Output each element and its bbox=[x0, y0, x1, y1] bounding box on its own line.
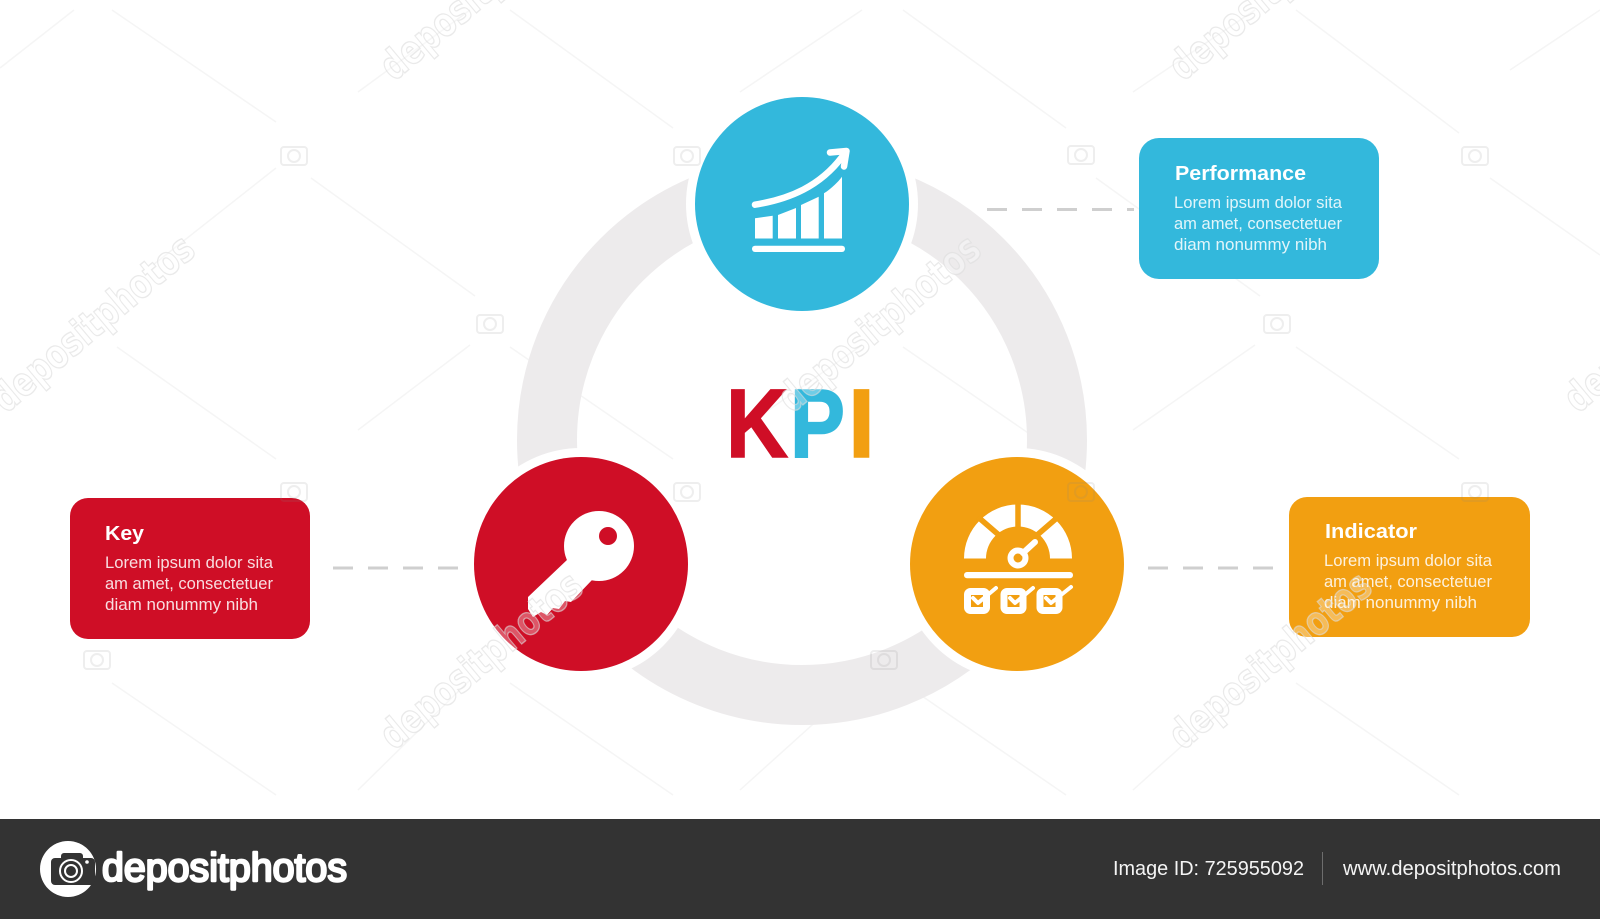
watermark: camera icons bbox=[84, 146, 1488, 669]
text: indicator body bbox=[1324, 551, 1493, 612]
text: indicator body: diam nonummy nibh bbox=[1324, 593, 1477, 612]
text: performance body: am amet, consectetuer bbox=[1174, 214, 1342, 233]
circle: indicator bbox=[901, 448, 1133, 680]
logo: wordmark: depositphotos bbox=[102, 846, 347, 890]
card: performance bbox=[1139, 138, 1379, 279]
footer bar bbox=[0, 819, 1600, 919]
connector: indicator bbox=[1148, 566, 1274, 570]
heading: performance: Performance bbox=[1175, 163, 1306, 185]
connector: performance bbox=[987, 208, 1134, 211]
watermark: diagonal text: depositphotos bbox=[769, 226, 990, 422]
connector: key bbox=[333, 566, 459, 570]
image id: Image ID: 725955092 bbox=[1113, 857, 1304, 880]
text: key body: diam nonummy nibh bbox=[105, 595, 258, 614]
watermark: diagonal text: depositphotos bbox=[1160, 563, 1381, 759]
logo: camera badge bbox=[40, 841, 96, 897]
text: key body bbox=[105, 553, 274, 614]
watermark: diagonal text: depositphotos bbox=[371, 563, 592, 759]
text: performance body: diam nonummy nibh bbox=[1174, 235, 1327, 254]
heading: indicator: Indicator bbox=[1325, 521, 1417, 543]
text: performance body: Lorem ipsum dolor sita bbox=[1174, 193, 1343, 212]
text: performance body bbox=[1174, 193, 1343, 254]
text: indicator body: Lorem ipsum dolor sita bbox=[1324, 551, 1493, 570]
title: KPI: K bbox=[726, 369, 788, 478]
icon: key bbox=[528, 511, 634, 617]
text: key body: am amet, consectetuer bbox=[105, 574, 273, 593]
circle: performance bbox=[686, 88, 918, 320]
title: KPI: I bbox=[848, 369, 875, 478]
text: indicator body: am amet, consectetuer bbox=[1324, 572, 1492, 591]
card: indicator bbox=[1289, 497, 1530, 637]
icon: gauge with checklist bbox=[964, 500, 1073, 610]
card: key bbox=[70, 498, 310, 639]
text: key body: Lorem ipsum dolor sita bbox=[105, 553, 274, 572]
heading: key: Key bbox=[105, 523, 145, 545]
title: KPI bbox=[726, 369, 875, 478]
ring bbox=[547, 185, 1057, 695]
website url: www.depositphotos.com bbox=[1342, 857, 1561, 880]
icon: growth chart bbox=[752, 151, 846, 252]
circle: key bbox=[465, 448, 697, 680]
title: KPI: P bbox=[790, 369, 845, 478]
